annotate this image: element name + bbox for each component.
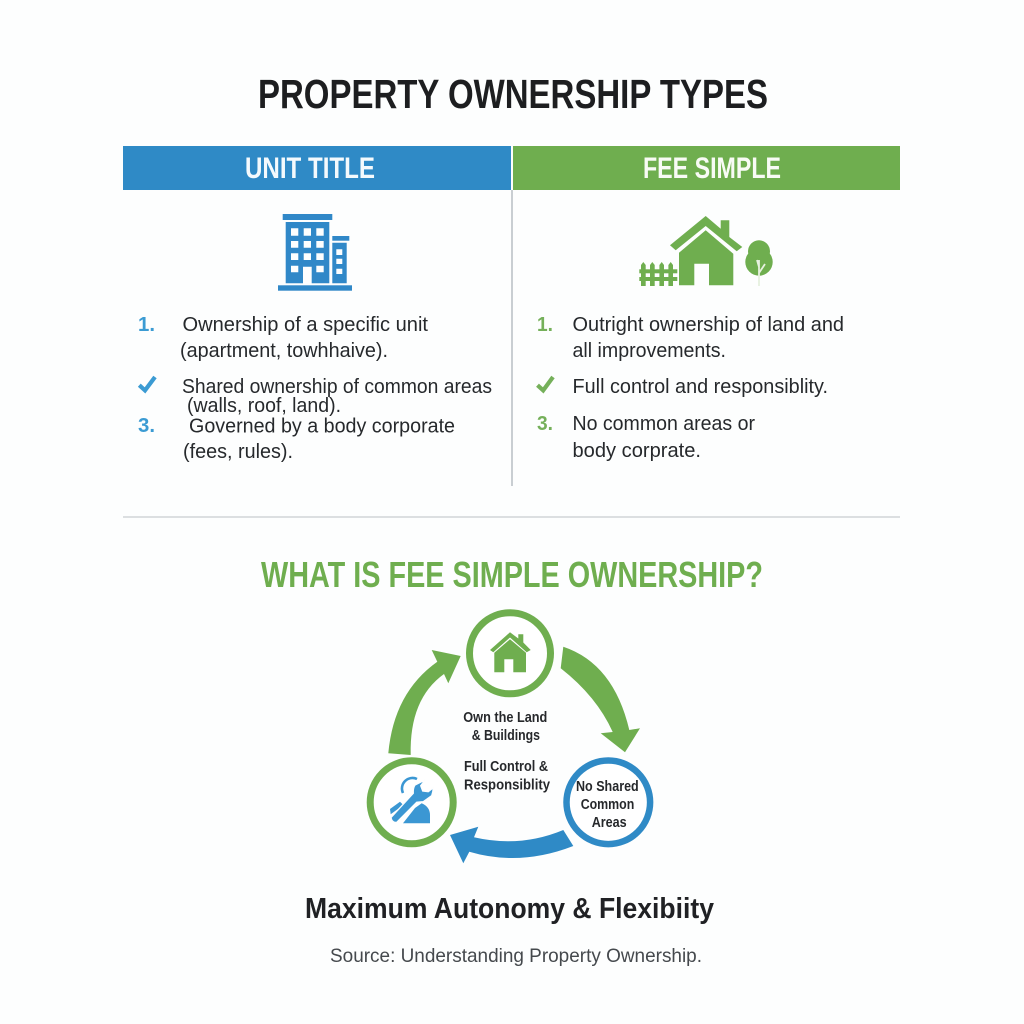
center text: Full Control &	[464, 759, 548, 775]
arrow: top to right	[561, 647, 640, 752]
node: full control icon	[370, 761, 453, 844]
list item 1: 1.	[537, 313, 553, 336]
center text: Responsiblity	[464, 778, 550, 794]
list item 3	[138, 414, 455, 463]
arrow: left to top	[388, 650, 461, 755]
list item 1	[537, 313, 844, 362]
icon: house with fence and tree	[639, 216, 773, 286]
list item 2: Shared ownership of common areas	[182, 375, 492, 398]
list item 3: Governed by a body corporate	[189, 414, 455, 438]
tagline: Maximum Autonomy & Flexibiity	[305, 893, 714, 925]
header: fee simple	[513, 146, 900, 190]
list item 1: all improvements.	[572, 339, 726, 362]
header: unit title	[123, 146, 511, 190]
list item 3: body corprate.	[572, 439, 701, 462]
center text: Own the Land	[463, 710, 547, 726]
list item 1: Outright ownership of land and	[572, 313, 844, 336]
node: own the land	[470, 613, 550, 694]
icon: apartment building	[278, 214, 352, 291]
center text	[463, 710, 550, 794]
list item 3: 3.	[537, 412, 553, 435]
source: Source: Understanding Property Ownership.	[330, 945, 702, 967]
node: no shared common areas: Common	[581, 797, 634, 813]
list item 2	[139, 375, 492, 417]
node: no shared common areas: No Shared	[576, 779, 639, 795]
list item 1	[138, 313, 428, 362]
list item 3: No common areas or	[572, 412, 755, 435]
header: unit title: UNIT TITLE	[245, 152, 375, 185]
node: no shared common areas: Areas	[592, 815, 627, 831]
arrow: right to left	[450, 827, 573, 863]
list item 1: (apartment, towhhaive).	[180, 339, 388, 362]
list item 1: 1.	[138, 313, 155, 336]
list item 1: Ownership of a specific unit	[182, 313, 428, 336]
center text: & Buildings	[472, 728, 540, 744]
panel: fee simple	[513, 146, 900, 462]
list item 3: 3.	[138, 414, 155, 437]
heading: what is fee simple ownership: WHAT IS FEE SIMPLE OWNERSHIP?	[261, 554, 763, 595]
header: fee simple: FEE SIMPLE	[643, 152, 781, 185]
panel: unit title	[123, 146, 511, 463]
list item 2: Full control and responsiblity.	[572, 375, 828, 398]
node: no shared common areas	[566, 760, 650, 844]
cycle diagram	[370, 613, 650, 863]
title: PROPERTY OWNERSHIP TYPES	[258, 71, 768, 117]
list item 3	[537, 412, 755, 462]
list item 2: (walls, roof, land).	[187, 394, 341, 417]
list item 3: (fees, rules).	[183, 440, 293, 463]
